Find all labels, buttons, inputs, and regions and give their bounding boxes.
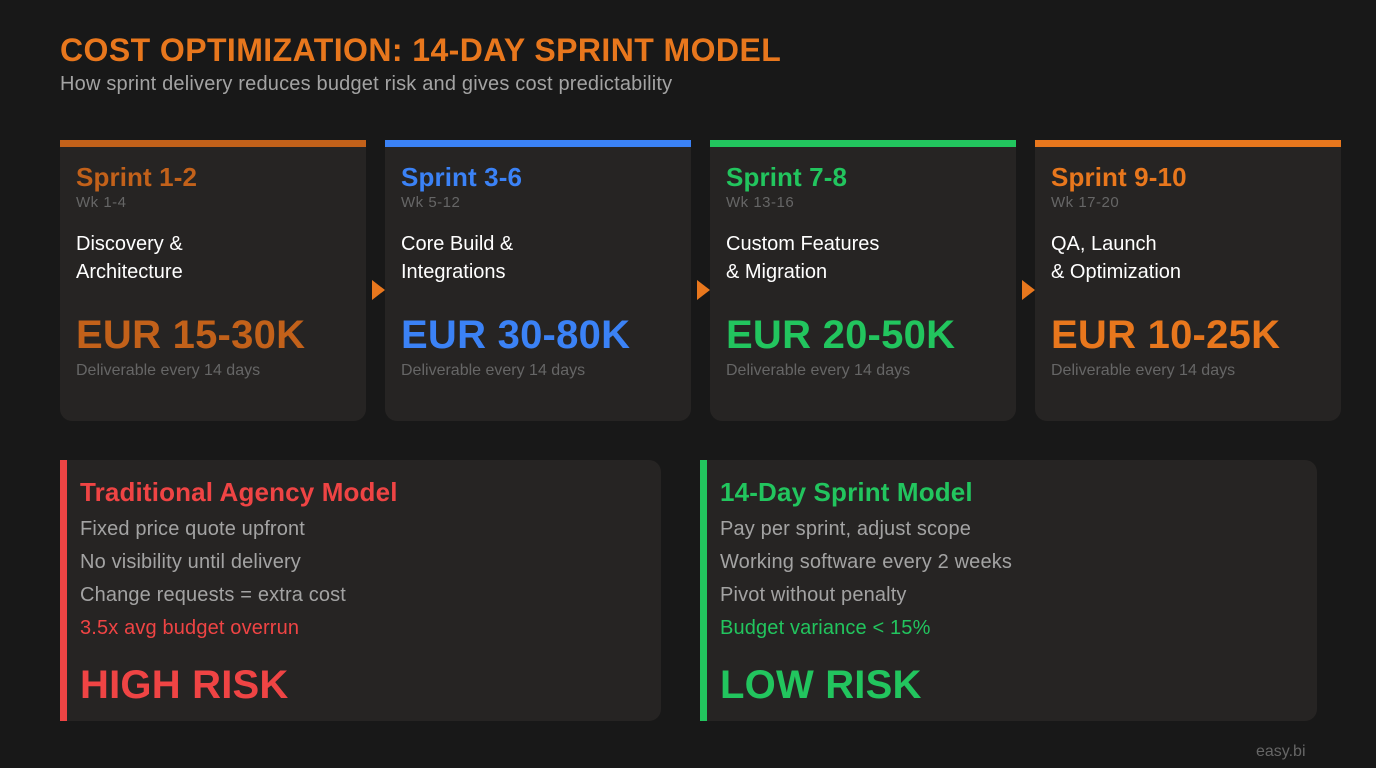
panel: sprint 9-10: Wk 17-20	[1051, 194, 1119, 211]
panel: 14-day sprint model: Pay per sprint, adjust scope	[720, 518, 971, 540]
panel: 14-day sprint model: Budget variance < 15%	[720, 617, 931, 639]
panel: 14-day sprint model: 14-Day Sprint Model	[720, 477, 973, 507]
panel: sprint 7-8: Deliverable every 14 days	[726, 362, 910, 379]
panel: sprint 7-8: EUR 20-50K	[726, 313, 955, 357]
panel: sprint 1-2: Deliverable every 14 days	[76, 362, 260, 379]
panel: sprint 1-2: Sprint 1-2	[76, 162, 197, 192]
panel: traditional agency model: 3.5x avg budget overrun	[80, 617, 299, 639]
panel: sprint 9-10: EUR 10-25K	[1051, 313, 1280, 357]
panel: traditional agency model: Change requests = extra cost	[80, 584, 346, 606]
panel: sprint 3-6: Integrations	[401, 261, 506, 283]
panel: sprint 7-8	[710, 140, 1016, 421]
panel: sprint 1-2: Discovery &	[76, 233, 183, 255]
panel: sprint 3-6: Sprint 3-6	[401, 162, 522, 192]
panel: 14-day sprint model: LOW RISK	[720, 663, 922, 707]
arrow: sprint 3-6 to 7-8	[697, 280, 710, 300]
panel: traditional agency model: HIGH RISK	[80, 663, 288, 707]
panel: 14-day sprint model: Working software every 2 weeks	[720, 551, 1012, 573]
panel: sprint 3-6	[385, 140, 691, 421]
panel: traditional agency model: Traditional Agency Model	[80, 477, 398, 507]
panel: sprint 9-10: & Optimization	[1051, 261, 1181, 283]
panel: sprint 9-10	[1035, 140, 1341, 421]
panel: sprint 3-6: EUR 30-80K	[401, 313, 630, 357]
panel: sprint 9-10: Deliverable every 14 days	[1051, 362, 1235, 379]
panel: 14-day sprint model: Pivot without penalty	[720, 584, 907, 606]
panel: sprint 1-2	[60, 140, 366, 421]
panel: sprint 7-8: Sprint 7-8	[726, 162, 847, 192]
panel: traditional agency model	[60, 460, 661, 721]
panel: 14-day sprint model	[700, 460, 1317, 721]
panel: sprint 7-8: Wk 13-16	[726, 194, 794, 211]
panel: sprint 1-2: EUR 15-30K	[76, 313, 305, 357]
arrow: sprint 7-8 to 9-10	[1022, 280, 1035, 300]
subtitle: How sprint delivery reduces budget risk and gives cost predictability	[60, 73, 672, 95]
arrow: sprint 1-2 to 3-6	[372, 280, 385, 300]
panel: sprint 1-2: Wk 1-4	[76, 194, 127, 211]
panel: traditional agency model: No visibility until delivery	[80, 551, 301, 573]
panel: traditional agency model: Fixed price quote upfront	[80, 518, 305, 540]
title: COST OPTIMIZATION: 14-DAY SPRINT MODEL	[60, 32, 781, 68]
panel: sprint 7-8: Custom Features	[726, 233, 879, 255]
panel: sprint 3-6: Deliverable every 14 days	[401, 362, 585, 379]
panel: sprint 9-10: Sprint 9-10	[1051, 162, 1187, 192]
panel: sprint 3-6: Core Build &	[401, 233, 513, 255]
footer brand: easy.bi	[1256, 743, 1306, 760]
panel: sprint 3-6: Wk 5-12	[401, 194, 460, 211]
panel: sprint 9-10: QA, Launch	[1051, 233, 1157, 255]
panel: sprint 1-2: Architecture	[76, 261, 183, 283]
panel: sprint 7-8: & Migration	[726, 261, 827, 283]
